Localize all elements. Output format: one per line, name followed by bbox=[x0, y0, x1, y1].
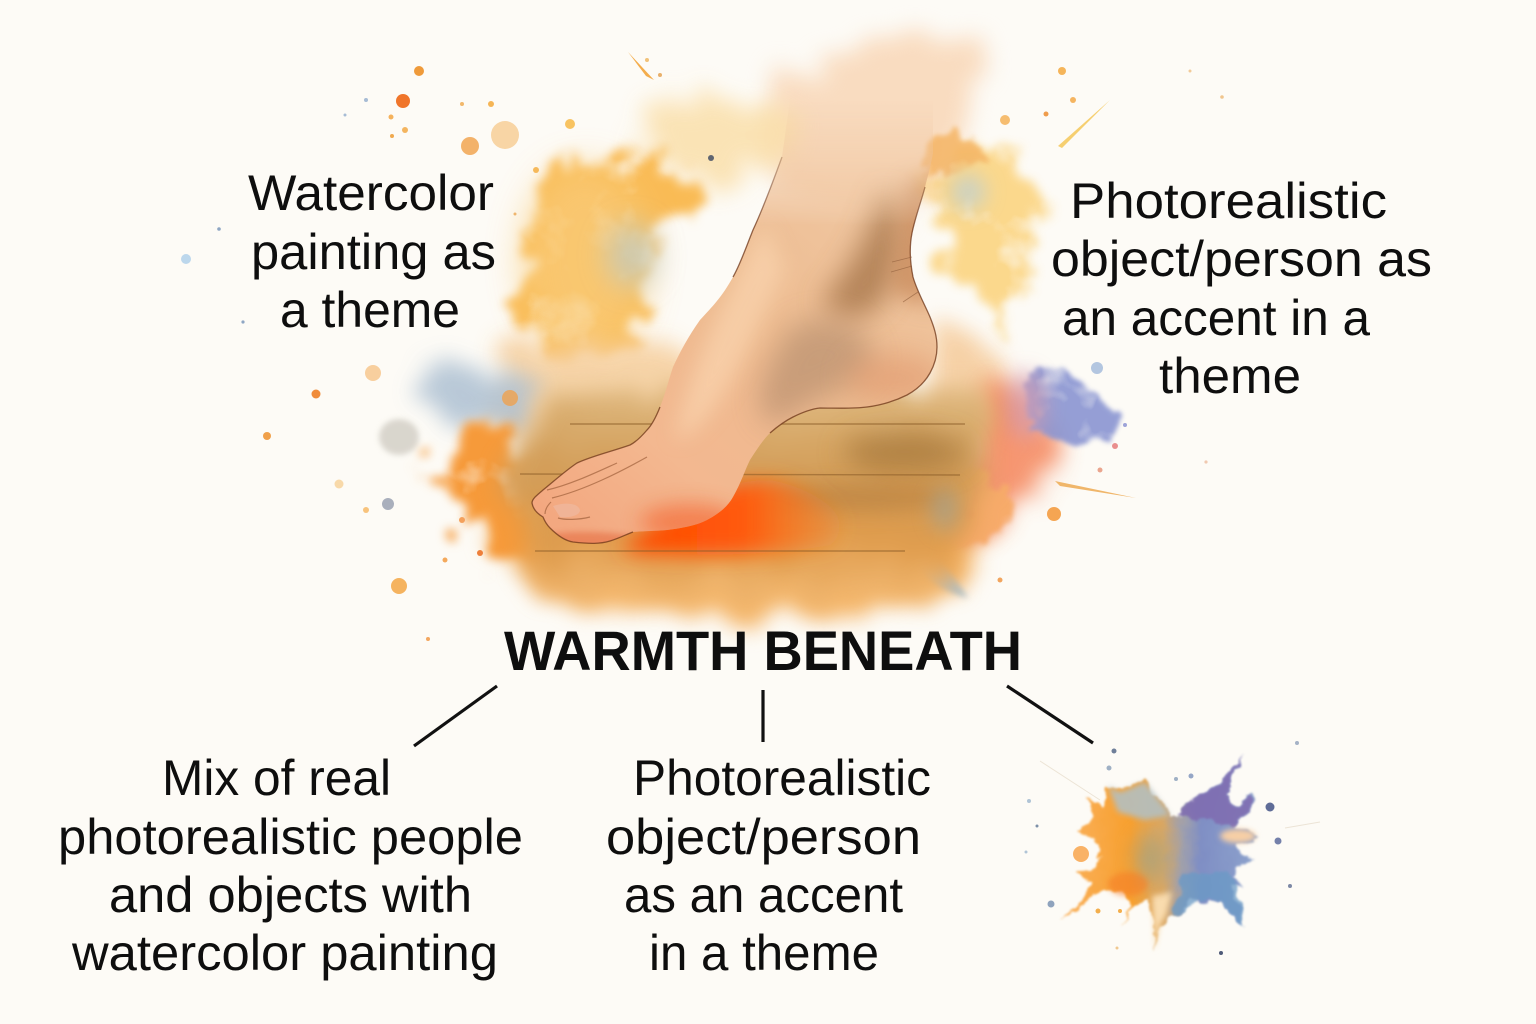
wash: left orange bbox=[440, 423, 546, 565]
wash: purple blue bbox=[1024, 367, 1119, 442]
wood floor bbox=[510, 382, 983, 602]
shadow: arch bbox=[760, 319, 875, 425]
text block: photorealistic accent right: Photorealistic bbox=[1070, 173, 1387, 229]
splash: pale grey top bbox=[1108, 782, 1170, 820]
wash: left yellow glow bbox=[523, 165, 647, 355]
splash: droplets bbox=[1024, 741, 1299, 955]
heading: Watercolor painting as a theme: Watercolor bbox=[248, 165, 494, 221]
wash: right blue tint bbox=[950, 174, 986, 210]
ankle wrinkles bbox=[891, 257, 918, 302]
splash: faint rays bbox=[1040, 761, 1320, 828]
wash: right orange patch bbox=[925, 133, 985, 177]
text block: photorealistic accent middle: as an accent bbox=[624, 867, 903, 923]
text block: photorealistic accent middle: Photorealistic bbox=[633, 750, 931, 806]
floor hot orange glow bbox=[620, 480, 840, 555]
splash: orange drop bbox=[1073, 846, 1089, 862]
heading: Watercolor painting as a theme: painting as bbox=[251, 224, 496, 280]
watercolor wash behind foot bbox=[379, 36, 1136, 619]
wash: grey bloom bbox=[379, 419, 419, 455]
splash: purple top bbox=[1180, 753, 1252, 825]
splatter dots around main painting bbox=[181, 58, 1224, 641]
wash: coral violet blend bbox=[1005, 371, 1045, 439]
floor plank lines bbox=[520, 424, 965, 551]
text block: photorealistic accent right: theme bbox=[1159, 348, 1301, 404]
wash: left blue grey bbox=[412, 364, 531, 429]
shadow: heel warm bbox=[847, 354, 943, 402]
text block: photorealistic accent middle: in a theme bbox=[649, 925, 879, 981]
text block: mix of real and watercolor: and objects with bbox=[109, 867, 472, 923]
shadow: back of ankle bbox=[888, 170, 929, 314]
streak: right orange bbox=[1055, 481, 1136, 498]
streak: top right yellow bbox=[1058, 100, 1110, 148]
text block: photorealistic accent middle bbox=[606, 750, 931, 981]
wash: left grey blue tint bbox=[606, 223, 658, 287]
toe creases bbox=[545, 457, 647, 519]
streak: top left orange bbox=[628, 52, 654, 80]
highlight: instep bbox=[678, 239, 783, 433]
wash: lower orange bbox=[480, 500, 992, 619]
splash: main body bbox=[1062, 753, 1262, 950]
text block: mix of real and watercolor: photorealistic people bbox=[58, 809, 523, 865]
splash: pale orange drip bbox=[1152, 892, 1172, 950]
wash: mid peach ground bbox=[498, 340, 700, 440]
text block: mix of real and watercolor: Mix of real bbox=[162, 750, 391, 806]
watercolor splash bbox=[1024, 741, 1320, 955]
shadow: achilles hollow bbox=[822, 185, 901, 318]
wash: bottom right blue bbox=[915, 557, 968, 598]
heading: Watercolor painting as a theme bbox=[248, 165, 496, 338]
splash: blue lower bbox=[1172, 872, 1245, 925]
text block: mix of real and watercolor bbox=[58, 750, 523, 981]
text block: photorealistic accent right bbox=[1051, 173, 1432, 404]
wash: right coral bbox=[950, 377, 1054, 536]
line to middle text bbox=[761, 690, 765, 742]
connector lines bbox=[414, 686, 1093, 746]
title: WARMTH BENEATH bbox=[504, 619, 1022, 682]
floor blue shadow bbox=[932, 488, 958, 532]
glow: ball of foot red bbox=[640, 504, 740, 540]
floor dark shading bbox=[843, 432, 967, 472]
glow: toes warm bbox=[555, 530, 628, 543]
wash: left yellow orange bbox=[523, 151, 690, 366]
foot body bbox=[532, 100, 937, 543]
toenail bbox=[553, 504, 580, 517]
text block: photorealistic accent right: an accent in a bbox=[1062, 290, 1370, 346]
line to splash bbox=[1007, 686, 1093, 743]
splash: peach right accent bbox=[1220, 829, 1256, 843]
foot shading bbox=[530, 170, 943, 548]
wash: right yellow bbox=[927, 148, 1035, 335]
text block: mix of real and watercolor: watercolor painting bbox=[71, 925, 498, 981]
wash: peach top bbox=[765, 36, 980, 217]
text block: photorealistic accent middle: object/person bbox=[606, 809, 921, 865]
splash: deep orange core bbox=[1108, 872, 1148, 896]
foot outline bbox=[532, 157, 937, 543]
wash: upper yellow band bbox=[632, 96, 800, 180]
text block: photorealistic accent right: object/person as bbox=[1051, 231, 1432, 287]
photorealistic foot bbox=[530, 100, 943, 548]
line to left text bbox=[414, 686, 497, 746]
heading: Watercolor painting as a theme: a theme bbox=[280, 282, 460, 338]
floor base bbox=[510, 382, 983, 602]
wash: right pale orange bbox=[945, 469, 1009, 545]
splash: centre olive bbox=[1134, 834, 1166, 882]
